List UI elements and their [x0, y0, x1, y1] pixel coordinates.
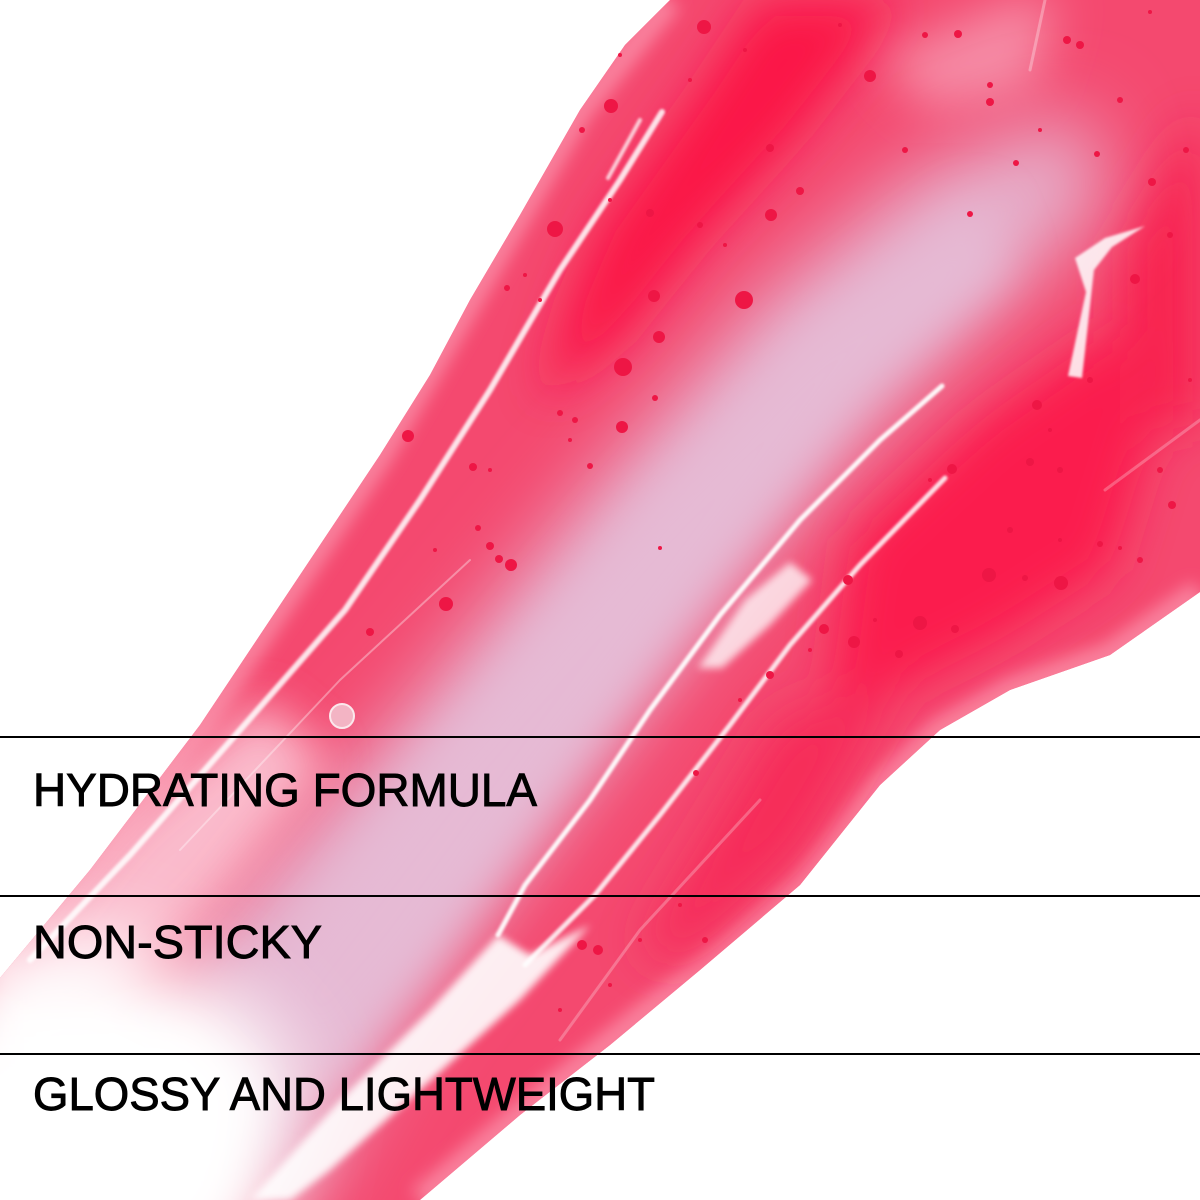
label: glossy and lightweight: GLOSSY AND LIGHTWEIGHT: [33, 1068, 655, 1120]
saturated red zones: [540, 0, 1200, 960]
top-right tick highlight: [1068, 226, 1145, 378]
wide sheen in lower centre: [698, 562, 812, 668]
label: non-sticky: NON-STICKY: [33, 916, 322, 968]
pale top patch: [880, 0, 1060, 110]
pale centre band: [170, 110, 1110, 1200]
label: hydrating formula: HYDRATING FORMULA: [33, 764, 537, 816]
second right highlight: [525, 478, 945, 965]
bottom white band: [250, 925, 590, 1200]
right long highlight: [498, 386, 942, 935]
faint streaks: [1105, 420, 1200, 490]
left long highlight: [30, 112, 662, 960]
bubbles: [330, 10, 1192, 1012]
lower-left pink wash: [0, 700, 330, 1060]
white fade bottom-left: [0, 930, 300, 1200]
divider lines: [0, 736, 1200, 738]
